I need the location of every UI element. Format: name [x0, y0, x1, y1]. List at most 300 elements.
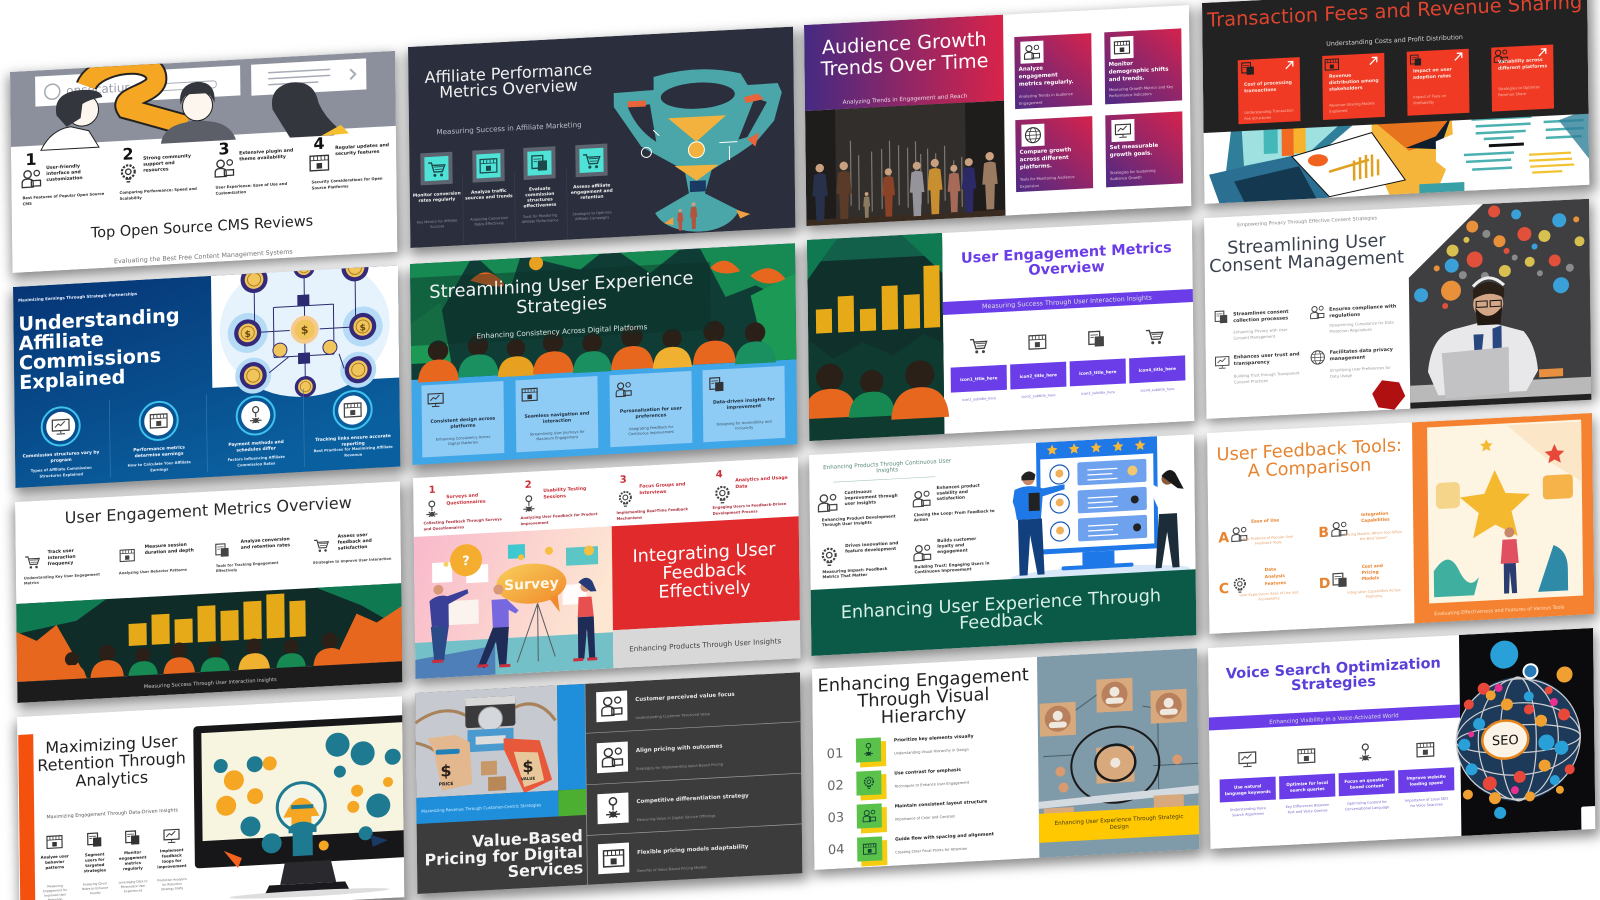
list items: Ensures compliance with — [1329, 303, 1397, 313]
steps: strategies — [84, 867, 107, 873]
steps: behavior — [45, 859, 65, 865]
feature list: feature development — [845, 546, 896, 555]
list items: Consent Practices — [1234, 378, 1268, 385]
feature cards: Inclusivity — [735, 426, 754, 431]
item labels: Earnings — [150, 467, 169, 472]
feature list: Builds customer — [937, 536, 977, 544]
placeholder buttons: icon2_title_here — [1020, 372, 1057, 379]
numbered list: Use contrast for emphasis — [894, 767, 961, 777]
comparison items: Models — [1362, 575, 1380, 582]
list items: Streamlining Compliance for Data — [1329, 320, 1394, 328]
metric items: interaction — [48, 554, 76, 561]
placeholder buttons: icon2_subtitle_here — [1022, 393, 1056, 399]
kicker: Maximizing Revenue Through Customer-Centric Strategies — [421, 802, 541, 814]
numbered methods: 2 — [525, 480, 532, 491]
action cards: Analyze — [1019, 66, 1043, 73]
numbered methods: Questionnaires — [446, 499, 486, 507]
slide: Value-Based Pricing for Digital Services — [415, 672, 802, 894]
list items: Protection Regulations — [1329, 327, 1372, 334]
item labels: Best Practices for Maximizing Affiliate — [314, 445, 393, 453]
steps: Loyalty — [90, 891, 101, 895]
strategy buttons: Text and Voice Queries — [1287, 808, 1328, 815]
numbered methods: 1 — [429, 485, 436, 496]
strategy buttons: Understanding Voice — [1230, 806, 1266, 812]
numbered features: 3 — [218, 139, 230, 159]
item labels: Tracking links ensure accurate — [315, 433, 391, 443]
title: Retention Through — [37, 748, 186, 775]
title: Through Visual — [856, 685, 989, 712]
item labels: Revenue — [344, 453, 363, 458]
title: User Engagement Metrics — [961, 240, 1172, 267]
title: Overview — [1028, 259, 1105, 279]
metric items: Strategies to Improve User Interaction — [313, 557, 392, 565]
comparison items: Analysis — [1265, 573, 1285, 580]
comparison items: B — [1318, 525, 1329, 541]
numbered features: Strong community — [143, 153, 191, 162]
feature list: Action — [914, 517, 928, 522]
list items: transparency — [1234, 359, 1270, 367]
caption band — [1039, 805, 1199, 843]
title: Understanding — [18, 304, 180, 336]
list items: Facilitates data privacy — [1330, 347, 1394, 356]
comparison items: Data — [1265, 566, 1276, 573]
comparison items: Integration — [1361, 511, 1388, 518]
action cards: demographic shifts — [1109, 67, 1169, 76]
metric labels: Success — [430, 224, 444, 229]
steps: Segment — [85, 851, 105, 857]
slide: Understanding Affiliate Commissions Explained — [13, 251, 400, 488]
steps: Leveraging Data to — [119, 879, 148, 885]
feature cards — [421, 366, 785, 457]
feature cards: Integrating Feedback for — [629, 425, 674, 431]
illustration: commission network: $ — [301, 323, 309, 337]
steps: Improved User — [44, 892, 67, 898]
title: Top Open Source CMS Reviews — [90, 213, 313, 242]
subtitle band — [943, 289, 1193, 315]
list items: Simplifying User Preferences for — [1330, 365, 1391, 373]
numbered methods: Data — [735, 483, 748, 490]
title: Streamlining User Experience — [429, 268, 693, 303]
metric items: Analyze conversion — [241, 536, 290, 545]
strategy buttons: Importance of Local SEO — [1405, 797, 1448, 803]
feature cards: Consistent design across — [430, 415, 496, 425]
numbered features: resources — [143, 166, 169, 174]
illustration: finance desk — [1208, 109, 1589, 204]
numbered list: Prioritize key elements visually — [894, 733, 974, 744]
red cards: Cost of processing — [1244, 80, 1292, 88]
action cards: Performance Indicators — [1109, 92, 1152, 98]
red cards: Profitability — [1413, 100, 1435, 105]
placeholder buttons — [951, 355, 1186, 403]
strategy buttons: loading speed — [1410, 780, 1443, 787]
numbered features: 4 — [313, 134, 325, 153]
numbered methods: Mechanisms — [617, 516, 643, 521]
kicker: Insights — [876, 467, 898, 474]
title: Strategies — [1291, 674, 1376, 694]
steps: Implement — [160, 847, 184, 853]
numbered list: Creating Clear Focal Points for Attention — [895, 847, 967, 855]
title panel — [804, 15, 1004, 111]
illustration: people and orange 2: onsecatiur — [66, 80, 129, 98]
steps: Experiences — [124, 888, 143, 893]
accent bar — [18, 734, 35, 900]
illustration: people and orange 2 — [10, 49, 396, 153]
numbered methods: 3 — [620, 474, 627, 486]
steps: Strategy Shifts — [161, 886, 184, 891]
comparison items: User Experience: Ease of Use and — [1239, 590, 1299, 597]
metric labels: Tools for Monitoring — [522, 213, 557, 219]
feature cards: Designing for Accessibility and — [717, 420, 772, 427]
title: Enhancing Engagement — [817, 665, 1029, 697]
item labels: determine earnings — [135, 451, 184, 459]
numbered features: interface and — [46, 169, 81, 177]
numbered methods: Implementing Real-Time Feedback — [617, 507, 688, 515]
title: Affiliate Performance — [424, 59, 592, 87]
illustration: survey team — [414, 526, 613, 679]
item labels: Types of Affiliate Commission — [31, 466, 92, 473]
comparison items: Key Features of Popular User — [1243, 535, 1294, 541]
illustration: survey team: Survey — [504, 575, 559, 594]
comparison items: C — [1219, 581, 1229, 597]
feature list: satisfaction — [937, 495, 965, 502]
title: Strategies — [516, 292, 607, 318]
action cards — [1014, 28, 1183, 192]
red hexagon — [1372, 379, 1405, 411]
steps: Personalize User — [121, 884, 146, 889]
pricing list: Strategies for Implementing Value-Based Pricing — [636, 762, 723, 771]
numbered features: User Experience: Ease of Use and — [215, 181, 287, 190]
action cards: Tools for Monitoring Audience — [1019, 175, 1075, 182]
slide: Audience Growth Trends Over Time — [804, 5, 1191, 226]
list items: Streamlines consent — [1233, 309, 1289, 318]
title: Pricing for Digital — [424, 842, 583, 870]
illustration: bars and audience — [16, 583, 402, 684]
comparison items — [1218, 510, 1403, 606]
title: Services — [508, 858, 583, 881]
feature cards: preferences — [635, 412, 667, 420]
title: Integrating User — [632, 539, 777, 567]
numbered features — [22, 137, 389, 206]
pricing list: Benefits of Value-Based Pricing Models — [637, 865, 707, 873]
slide: Enhancing Engagement Through Visual Hierarchy — [812, 648, 1199, 870]
numbered methods: Collecting Feedback Through Surveys — [424, 517, 503, 525]
metric labels: retention — [580, 194, 603, 201]
slide: Streamlining User Experience Strategies — [410, 242, 797, 465]
metric items: Metrics — [24, 581, 39, 586]
steps: Analyze user — [41, 853, 69, 860]
feature cards: Seamless navigation and — [524, 410, 589, 420]
numbered methods: Analytics and Usage — [735, 475, 788, 484]
feature cards: Personalization for user — [620, 405, 683, 415]
illustration: commission network: $ — [245, 330, 251, 340]
kicker: Enhancing Products Through Continuous User — [823, 458, 952, 471]
title: Hierarchy — [881, 704, 967, 728]
steps: feedback — [162, 852, 182, 859]
steps: users for — [85, 857, 105, 863]
action cards: Strategies for Sustaining — [1110, 169, 1156, 175]
numbered features: 2 — [122, 144, 134, 164]
feature cards: Enhancing Consistency Across — [436, 435, 491, 442]
title: Analytics — [75, 768, 148, 790]
pricing list: Flexible pricing models adaptability — [637, 844, 749, 856]
title: Audience Growth — [822, 28, 987, 59]
numbered features: Regular updates and — [335, 142, 389, 151]
placeholder buttons: icon4_subtitle_here — [1141, 387, 1175, 393]
item labels: program — [50, 457, 72, 464]
illustration: review monitor — [1009, 434, 1191, 585]
strategy buttons: Optimize for local — [1286, 780, 1329, 787]
strategy buttons: language keywords — [1225, 789, 1271, 796]
red cards: Explained — [1329, 109, 1348, 114]
numbered features: Comparing Performance: Speed and — [119, 186, 197, 195]
steps: regularly — [123, 865, 143, 871]
comparison items: Features — [1265, 580, 1287, 587]
item labels: How to Calculate Your Affiliate — [128, 460, 191, 468]
feature cards: improvement — [727, 403, 762, 411]
feature cards: Digital Platforms — [448, 440, 478, 446]
item labels: Factors Influencing Affiliate — [228, 455, 285, 462]
metric items: and retention rates — [241, 542, 290, 551]
red cards: Revenue — [1329, 73, 1351, 80]
red cards: distribution among — [1329, 78, 1379, 86]
red cards: Revenue Sharing Models — [1329, 101, 1375, 108]
pricing list: Competitive differentiation strategy — [636, 793, 749, 805]
strategy buttons: for Voice Searches — [1410, 802, 1443, 808]
numbered list: Maintain consistent layout structure — [895, 799, 987, 810]
steps: Analyzing Churn — [83, 881, 107, 887]
numbered list: Importance of Color and Contrast — [895, 814, 956, 822]
slide: Enhancing User Experience Through Feedback — [809, 434, 1196, 656]
metric items: feedback and — [338, 538, 372, 546]
item labels — [23, 433, 393, 480]
photo: people in front of bars — [805, 101, 1005, 226]
feature list: user insights — [845, 499, 877, 507]
metric labels: Strategies to Optimize — [572, 210, 612, 216]
item labels: Structures Explained — [40, 472, 83, 479]
illustration: trophy — [613, 65, 783, 236]
numbered list: 04 — [828, 842, 845, 858]
numbered methods: Surveys and — [446, 492, 478, 500]
comparison items: Pricing — [1362, 569, 1379, 576]
action cards: Engagement — [1019, 101, 1043, 106]
numbered methods — [423, 466, 788, 531]
numbered methods: Usability Testing — [543, 486, 586, 494]
metric labels: Key Metrics for Affiliate — [417, 218, 457, 225]
comparison items: Accessibility — [1258, 596, 1280, 601]
numbered list — [827, 731, 995, 868]
title: Effectively — [658, 578, 751, 603]
action cards: Analyzing Trends in Audience — [1019, 92, 1074, 99]
slide: User Engagement Metrics Overview (purple) — [801, 220, 1194, 441]
feature list: improvement through — [845, 493, 898, 502]
photo: wooden user cubes — [1037, 648, 1199, 858]
feature list: Through User Insights — [822, 520, 873, 527]
steps: Measuring — [47, 884, 63, 888]
red cards: adoption rates — [1413, 73, 1451, 81]
title band: Feedback — [959, 609, 1044, 634]
action cards: Audience Growth — [1110, 176, 1142, 181]
title: Consent Management — [1209, 248, 1404, 277]
pricing list: Align pricing with outcomes — [636, 743, 723, 754]
icon tiles — [420, 144, 608, 246]
metric items: Analyzing User Behavior Patterns — [119, 568, 187, 575]
red cards: Understanding Transaction — [1244, 108, 1294, 115]
numbered list: 03 — [827, 810, 844, 826]
title band: Enhancing User Experience Through — [841, 586, 1161, 623]
numbered list: Guide flow with spacing and alignment — [895, 831, 995, 843]
title: Metrics Overview — [439, 76, 578, 102]
photo: price and value tags: VALUE — [521, 776, 536, 781]
metric items: Track user — [48, 548, 75, 555]
photo: price and value tags: $ — [522, 757, 534, 776]
comparison items: Pricing Models: Which Tool Offers — [1344, 530, 1402, 537]
item labels: Commission Rates — [237, 461, 276, 468]
steps: improvement — [157, 863, 187, 869]
comparison items: D — [1319, 576, 1331, 592]
footer band — [613, 620, 800, 668]
feature list: Measuring Impact: Feedback — [822, 566, 888, 574]
numbered methods: Improvement — [521, 521, 549, 526]
footer band — [17, 661, 402, 703]
strategy buttons: Key Differences Between — [1286, 803, 1329, 809]
numbered list: 01 — [827, 746, 843, 762]
steps: Monitor — [124, 849, 141, 855]
comparison items: Feedback Tools — [1255, 540, 1282, 546]
feature list: engagement — [937, 548, 968, 555]
pricing list: Understanding Customer Perceived Value — [635, 712, 711, 720]
metric items: frequency — [48, 560, 73, 567]
red cards: Variability across — [1498, 57, 1543, 65]
slide: Voice Search Optimization Strategies — [1208, 628, 1599, 850]
illustration: survey team: ? — [462, 554, 470, 569]
comparison items: the Best Value? — [1360, 536, 1387, 541]
title: Trends Over Time — [819, 49, 989, 81]
title panel — [612, 516, 800, 630]
comparison items: Capabilities — [1361, 517, 1390, 524]
strategy buttons: Conversational Language — [1345, 805, 1389, 811]
item labels: schedules differ — [236, 445, 277, 454]
metric items: Effectively — [216, 568, 238, 573]
list items: regulations — [1329, 312, 1360, 319]
title: Voice Search Optimization — [1226, 655, 1441, 683]
numbered features: Best Features of Popular Open Source — [22, 191, 105, 200]
red cards: stakeholders — [1329, 85, 1363, 93]
photo: price and value tags: $ — [440, 761, 452, 781]
red cards: Impact on user — [1413, 67, 1453, 74]
numbered features: Source Platforms — [312, 183, 349, 190]
action cards: Monitor — [1109, 61, 1133, 68]
steps: loops for — [162, 858, 182, 864]
numbered list: 02 — [827, 778, 844, 794]
feature cards: Data-driven insights for — [713, 396, 776, 406]
comparison items: A — [1218, 530, 1229, 546]
steps: targeted — [85, 862, 105, 868]
comparison items: Platforms — [1366, 594, 1383, 599]
title: User Engagement Metrics Overview — [65, 493, 352, 527]
red cards: transactions — [1244, 87, 1277, 94]
metric labels: Affiliate Performance — [522, 218, 559, 224]
red cards: Fee Structures — [1244, 116, 1271, 121]
title: A Comparison — [1248, 455, 1371, 482]
steps: metrics — [125, 860, 142, 866]
subtitle: Measuring Success in Affiliate Marketing — [436, 120, 582, 137]
action cards: Compare growth — [1020, 147, 1071, 156]
illustration: commission network: $ — [360, 323, 366, 334]
action cards: metrics regularly. — [1019, 79, 1074, 88]
feature list: Metrics That Matter — [822, 572, 867, 579]
caption band: Enhancing User Experience Through Strategic — [1055, 814, 1183, 827]
metric items: Understanding Key User Engagement — [24, 572, 100, 581]
title: Commissions — [19, 344, 161, 375]
pricing list: Measuring Value in Digital Service Offerings — [637, 814, 716, 822]
numbered methods: Analyzing User Feedback for Product — [521, 512, 598, 520]
photo: man at laptop with social icons — [1408, 199, 1591, 409]
title: Value-Based — [472, 826, 583, 851]
feature list: Closing the Loop: From Feedback to — [914, 508, 995, 517]
comparison items: Ease of Use — [1251, 517, 1279, 525]
feature cards: interaction — [543, 417, 571, 425]
strategy buttons: search queries — [1290, 786, 1325, 793]
feature cards: platforms — [450, 423, 476, 430]
numbered features: support and — [143, 160, 175, 168]
dividers — [585, 672, 802, 885]
photo: price and value tags: PRICE — [439, 781, 454, 788]
feature list: Enhances product — [936, 483, 980, 491]
item labels: Payment methods and — [228, 439, 284, 448]
subtitle: Enhancing Consistency Across Digital Platforms — [476, 322, 648, 340]
rule — [833, 477, 935, 482]
action cards: Set measurable — [1110, 143, 1159, 151]
numbered methods: and Questionnaires — [424, 525, 465, 531]
comparison items: Cost and — [1362, 563, 1383, 570]
placeholder buttons: icon4_title_here — [1139, 366, 1176, 373]
metric labels: effectiveness — [524, 202, 557, 209]
numbered list: Techniques to Enhance User Engagement — [893, 781, 970, 789]
list items: Enhances user trust and — [1234, 351, 1300, 361]
feature cards: Maximum Engagement — [536, 435, 579, 441]
slide: User Feedback Tools: A Comparison — [1207, 413, 1594, 634]
slide: User Engagement Metrics Overview — [15, 481, 402, 703]
action cards: Expansion — [1020, 184, 1040, 189]
slide: Maximizing User Retention Through Analytics — [17, 696, 410, 900]
red cards: Revenue Share — [1498, 92, 1527, 97]
illustration: crowd and foliage — [410, 242, 796, 383]
numbered features: customization — [46, 175, 83, 183]
numbered methods: Development Process — [713, 509, 758, 516]
illustration: monitor with user network — [193, 715, 410, 900]
metric items: Assess user — [338, 532, 368, 540]
steps: for Retention — [162, 882, 182, 887]
title: Feedback — [662, 560, 747, 584]
slide: Integrating User Feedback Effectively — [413, 457, 800, 679]
item labels: reporting — [341, 440, 365, 448]
list items: collection processes — [1233, 315, 1288, 324]
numbered features: 1 — [25, 150, 37, 169]
colour blocks — [415, 684, 587, 824]
steps: patterns — [45, 864, 65, 870]
steps: Rates to Enhance — [82, 886, 108, 891]
metric labels: commission — [525, 191, 554, 198]
metric labels: Affiliate Campaigns — [575, 215, 609, 221]
subtitle: Analyzing Trends in Engagement and Reach — [843, 94, 968, 106]
strategy buttons: Search Algorithms — [1232, 812, 1264, 817]
numbered features: User-friendly — [46, 163, 80, 171]
slide: Affiliate Performance Metrics Overview — [408, 27, 795, 248]
numbered features: Security Considerations for Open — [311, 176, 383, 184]
metric items: duration and depth — [145, 547, 194, 556]
caption: Evaluating Effectiveness and Features of Various Tools — [1434, 605, 1565, 617]
strategy buttons: Use natural — [1234, 783, 1262, 790]
